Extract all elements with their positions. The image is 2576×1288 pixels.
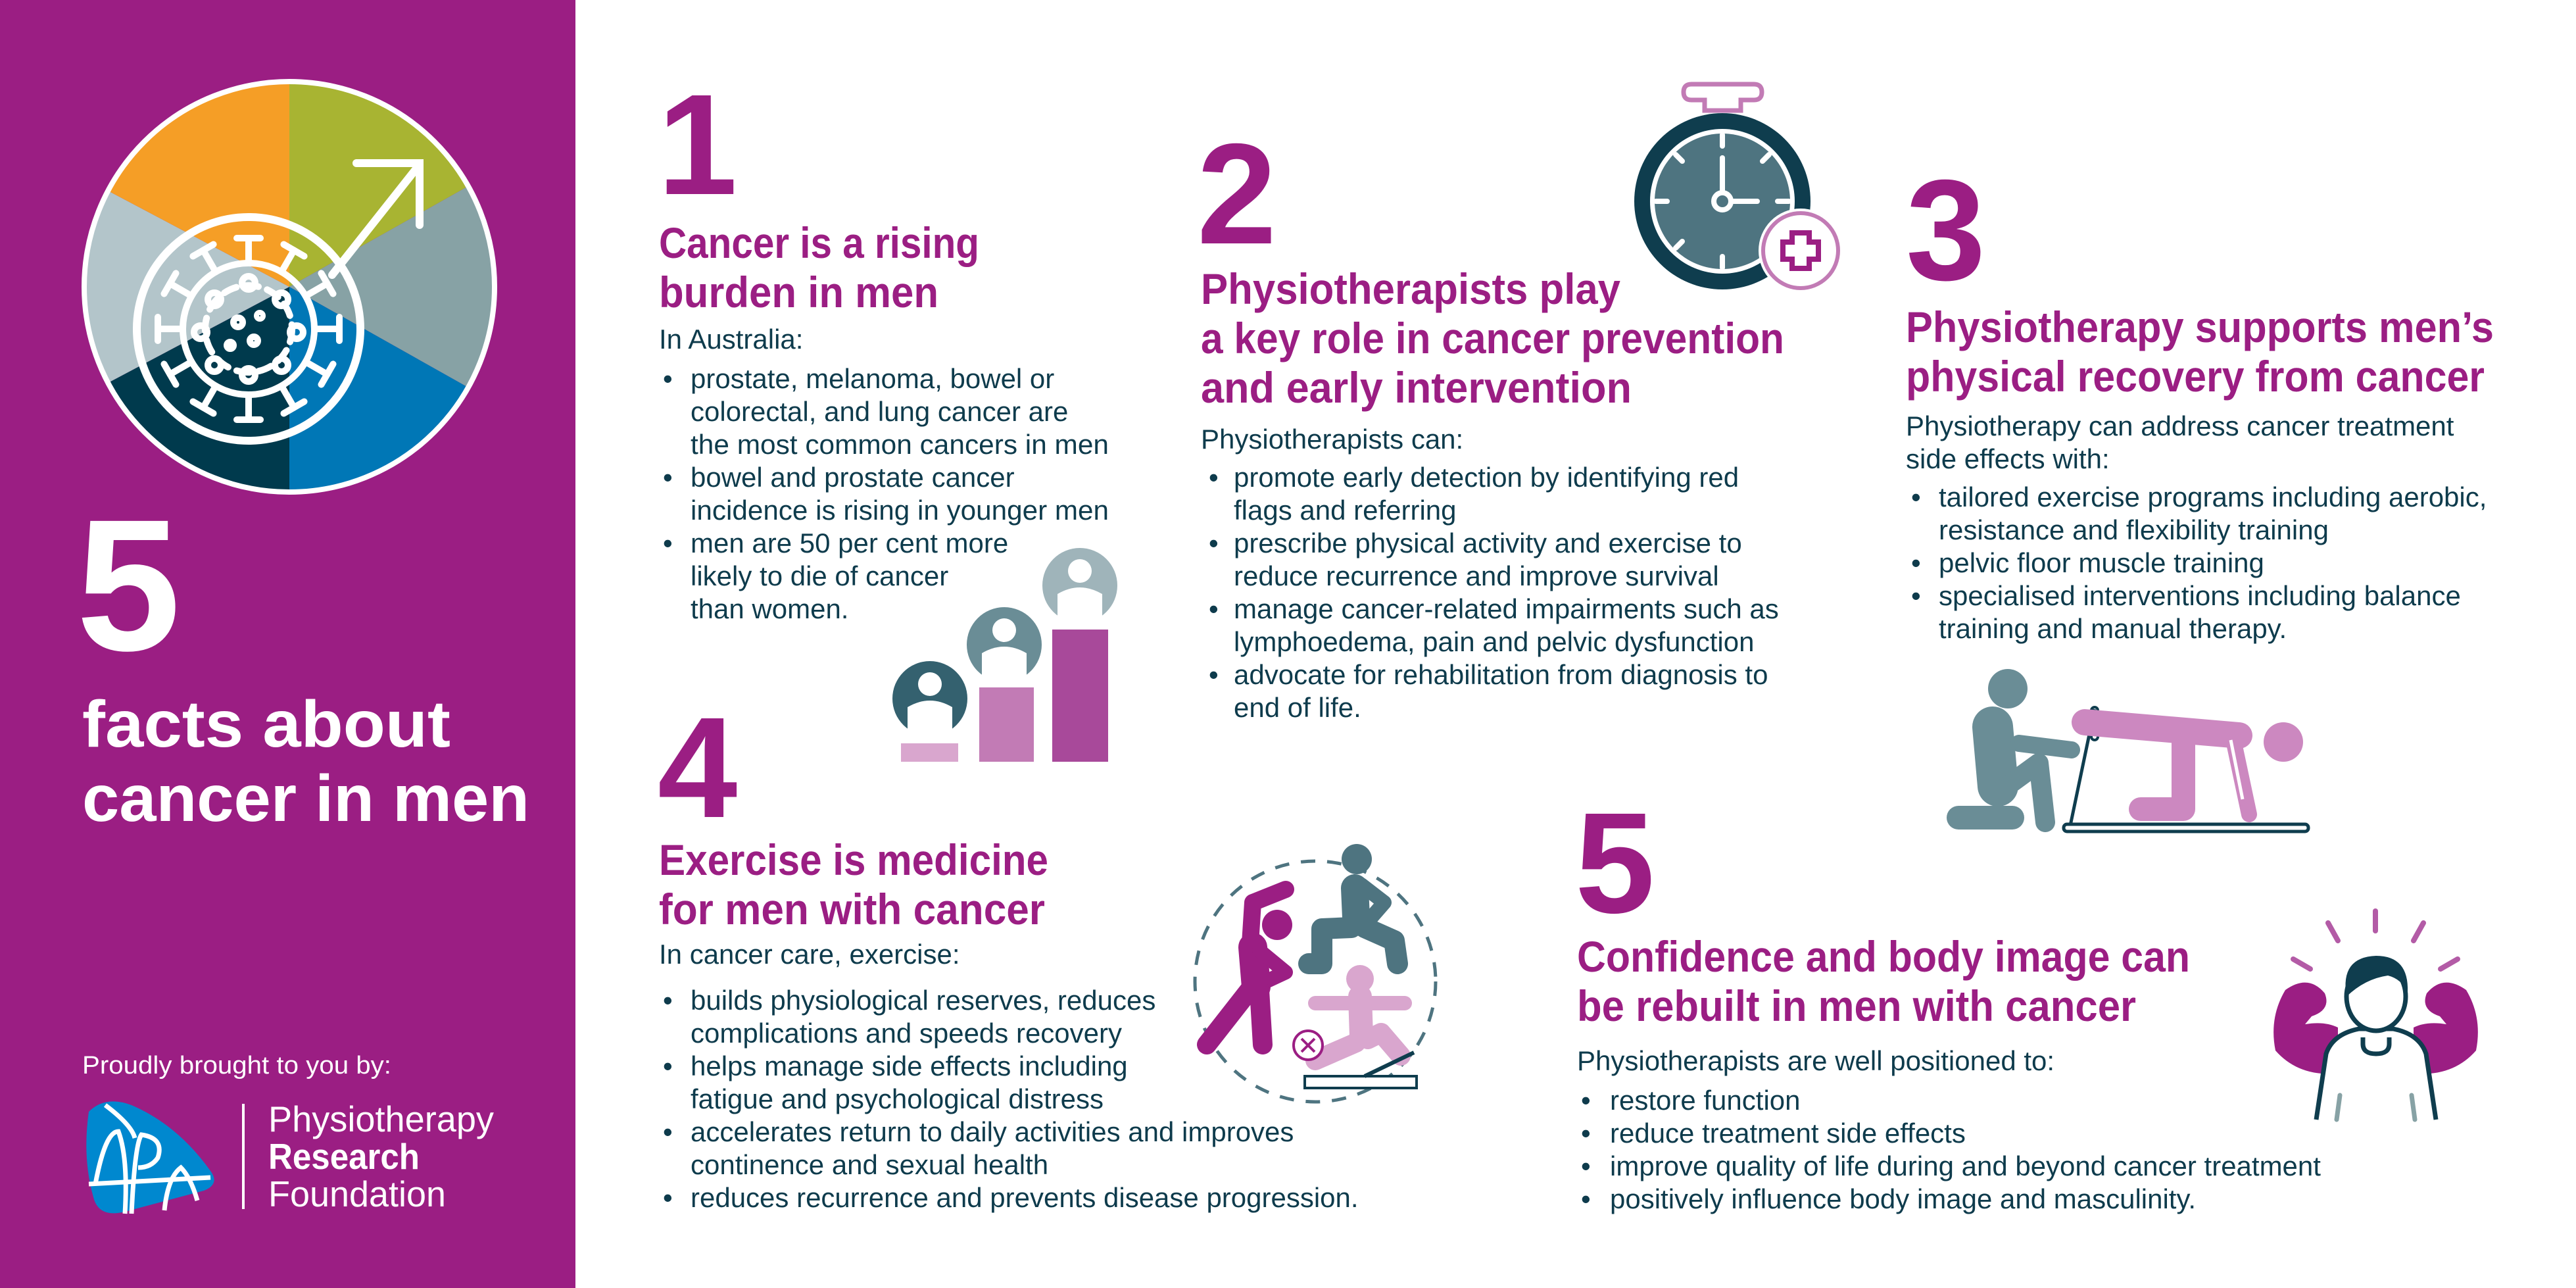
icon: stopwatch (1634, 84, 1843, 293)
text 1: incidence is rising in younger men (691, 495, 1109, 526)
text 5: restore function (1610, 1085, 1801, 1116)
text 4: In cancer care, exercise: (659, 939, 960, 970)
section 3: 3 (1906, 151, 1985, 310)
text 1: bowel and prostate cancer (691, 462, 1015, 493)
logo: Physiotherapy (268, 1099, 494, 1139)
text 2: Physiotherapists can: (1201, 424, 1463, 455)
heading 2: and early intervention (1201, 363, 1632, 412)
heading 1: Cancer is a rising (659, 218, 979, 267)
section 1 (658, 65, 1117, 762)
text 1: colorectal, and lung cancer are (691, 396, 1068, 427)
text 1: prostate, melanoma, bowel or (691, 363, 1054, 394)
heading 3: physical recovery from cancer (1906, 352, 2485, 401)
heading 1: burden in men (659, 268, 938, 316)
text 4: • (663, 985, 673, 1016)
text 5: positively influence body image and masculinity. (1610, 1183, 2196, 1214)
heading 1 (659, 218, 979, 316)
text 5: • (1581, 1118, 1591, 1149)
text 2: lymphoedema, pain and pelvic dysfunction (1234, 626, 1754, 657)
title: facts about (82, 687, 450, 761)
section 2: 2 (1197, 114, 1276, 274)
heading 4 (659, 835, 1048, 933)
text 4: fatigue and psychological distress (691, 1083, 1104, 1114)
text 3: • (1911, 547, 1921, 578)
text 1: In Australia: (659, 324, 803, 355)
text 2: end of life. (1234, 692, 1361, 723)
text 2: prescribe physical activity and exercise to (1234, 528, 1742, 558)
icon: exercise figures (1195, 844, 1436, 1102)
heading 5: Confidence and body image can (1577, 932, 2190, 981)
text 4: builds physiological reserves, reduces (691, 985, 1155, 1016)
icon: flexing man (2273, 911, 2478, 1120)
text 3: • (1911, 580, 1921, 611)
text 4: • (663, 1116, 673, 1147)
section 4: 4 (658, 688, 737, 848)
text 5: • (1581, 1183, 1591, 1214)
text 4 (659, 939, 1359, 1213)
text 2: manage cancer-related impairments such as (1234, 593, 1779, 624)
text 2: • (1209, 659, 1219, 690)
text 4: • (663, 1182, 673, 1213)
text 5: reduce treatment side effects (1610, 1118, 1966, 1149)
text 2: • (1209, 528, 1219, 558)
heading 5: be rebuilt in men with cancer (1577, 981, 2136, 1030)
text 2: advocate for rehabilitation from diagnosis to (1234, 659, 1768, 690)
heading 5 (1577, 932, 2190, 1030)
text 1: • (663, 462, 673, 493)
heading 3 (1906, 303, 2494, 401)
title (82, 687, 529, 835)
text 3: resistance and flexibility training (1939, 514, 2329, 545)
heading 3: Physiotherapy supports men’s (1906, 303, 2494, 351)
text 1: • (663, 528, 673, 558)
heading 4: Exercise is medicine (659, 835, 1048, 884)
section 5: 5 (1575, 783, 1655, 943)
text 4: helps manage side effects including (691, 1051, 1128, 1081)
text 4: • (663, 1051, 673, 1081)
text 1 (659, 324, 1109, 624)
text 4: complications and speeds recovery (691, 1018, 1122, 1049)
credit text: Proudly brought to you by: (82, 1052, 391, 1079)
text 3: side effects with: (1906, 443, 2110, 474)
text 3 (1906, 410, 2487, 644)
text 1: men are 50 per cent more (691, 528, 1008, 558)
text 5: • (1581, 1085, 1591, 1116)
text 4: accelerates return to daily activities and improves (691, 1116, 1294, 1147)
text 1: than women. (691, 593, 848, 624)
text 3: tailored exercise programs including aerobic, (1939, 482, 2487, 512)
section 1: 1 (658, 65, 737, 225)
heading 2: a key role in cancer prevention (1201, 314, 1784, 362)
icon: podium people (892, 548, 1117, 762)
text 2: • (1209, 593, 1219, 624)
text 1: likely to die of cancer (691, 560, 948, 591)
text 2: promote early detection by identifying red (1234, 462, 1739, 493)
text 1: the most common cancers in men (691, 429, 1109, 460)
logo: Research (268, 1136, 420, 1177)
text 5 (1577, 1045, 2321, 1214)
text 5: Physiotherapists are well positioned to: (1577, 1045, 2054, 1076)
text 4: reduces recurrence and prevents disease progression. (691, 1182, 1359, 1213)
left panel (0, 0, 575, 1288)
text 4: continence and sexual health (691, 1149, 1048, 1180)
heading 2 (1201, 264, 1784, 412)
text 2: • (1209, 462, 1219, 493)
section 3 (1906, 151, 2494, 831)
text 3: training and manual therapy. (1939, 613, 2287, 644)
text 2: reduce recurrence and improve survival (1234, 560, 1719, 591)
text 3: • (1911, 482, 1921, 512)
icon: pie with virus and male arrow (82, 79, 497, 495)
logo: Foundation (268, 1174, 446, 1214)
logo (86, 1099, 494, 1214)
text 5: • (1581, 1151, 1591, 1181)
section 2 (1197, 84, 1843, 723)
text 2 (1201, 424, 1779, 723)
icon: therapist with patient (1958, 669, 2308, 831)
heading 4: for men with cancer (659, 885, 1045, 933)
text 2: flags and referring (1234, 495, 1457, 526)
text 3: Physiotherapy can address cancer treatment (1906, 410, 2454, 441)
text 3: pelvic floor muscle training (1939, 547, 2264, 578)
title: cancer in men (82, 762, 529, 835)
section 5 (1575, 783, 2478, 1214)
text 3: specialised interventions including balance (1939, 580, 2461, 611)
text 5: improve quality of life during and beyond cancer treatment (1610, 1151, 2321, 1181)
section 4 (658, 688, 1436, 1213)
text 1: • (663, 363, 673, 394)
heading 2: Physiotherapists play (1201, 264, 1620, 313)
big number 5: 5 (76, 481, 181, 690)
